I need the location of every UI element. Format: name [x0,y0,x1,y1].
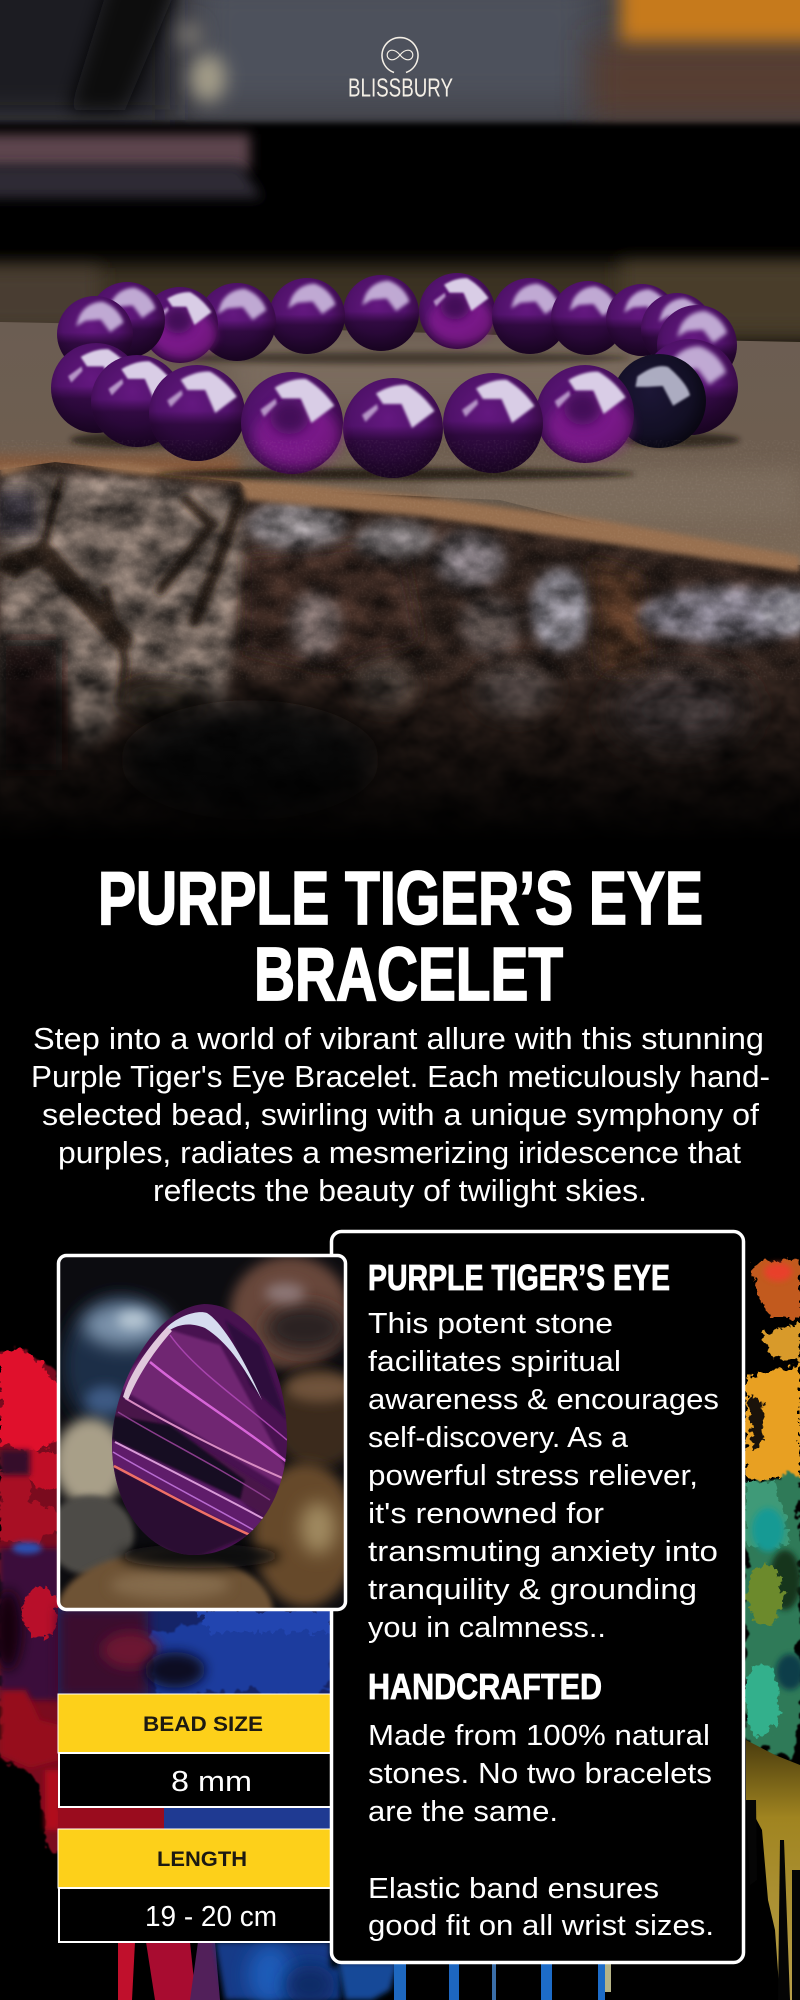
blurred photo background [60,1286,177,1432]
handcrafted description: Made from 100% natural [368,1720,710,1752]
brand name: BLISSBURY [348,72,453,102]
rock cliff face [0,462,800,818]
bead size label [58,1694,332,1753]
panel heading: handcrafted: HANDCRAFTED [368,1666,602,1707]
stone description: facilitates spiritual [368,1346,621,1378]
length label [58,1829,332,1888]
panel heading: purple tiger's eye: PURPLE TIGER’S EYE [368,1257,670,1298]
title [98,856,703,1016]
intro paragraph [31,1021,770,1208]
stone description: This potent stone [368,1308,613,1340]
blurred backdrop [0,0,800,344]
handcrafted description: stones. No two bracelets [368,1758,712,1790]
length label: LENGTH [157,1848,247,1871]
bead size label: BEAD SIZE [143,1713,263,1736]
intro paragraph: Purple Tiger's Eye Bracelet. Each meticulously hand- [31,1059,770,1094]
stone description: transmuting anxiety into [368,1536,718,1568]
hero photo: bracelet on rock [0,0,800,860]
intro paragraph: Step into a world of vibrant allure with this stunning [33,1021,764,1056]
purple stone [112,1304,287,1555]
photo border [58,1256,346,1610]
intro paragraph: purples, radiates a mesmerizing iridescence that [58,1135,741,1170]
spec table [58,1694,333,1942]
paint drips: bottom [118,1942,611,2000]
bracelet beads [51,273,738,478]
logo ring with infinity [382,38,418,72]
rock ledge edge [0,462,800,572]
photo frame [58,1254,346,1610]
title: BRACELET [254,932,563,1016]
length value: 19 - 20 cm [145,1901,277,1933]
stone description [368,1308,719,1644]
handcrafted description [368,1720,714,1942]
rock top surface [0,322,800,575]
handcrafted description: Elastic band ensures [368,1873,659,1905]
pebbles [60,1257,344,1608]
stone description: powerful stress reliever, [368,1460,698,1492]
paint splash: blue under stone photo [58,1608,332,1830]
stone description: self-discovery. As a [368,1422,628,1454]
stone description: awareness & encourages [368,1384,719,1416]
stone description: you in calmness.. [368,1612,606,1644]
stone description: tranquility & grounding [368,1574,697,1606]
info panel [332,1232,744,1962]
bracelet shadows [70,352,740,480]
paint splash: right colours [744,1260,800,2000]
stone photo [56,1254,348,1612]
handcrafted description: good fit on all wrist sizes. [368,1910,714,1942]
rock grain [0,440,800,680]
stone description: it's renowned for [368,1498,605,1530]
paint splash: left red and purple [0,1349,62,1850]
logo [348,38,453,102]
intro paragraph: reflects the beauty of twilight skies. [153,1173,647,1208]
length value [59,1888,333,1942]
intro paragraph: selected bead, swirling with a unique symphony of [42,1097,759,1132]
dark bead [612,354,706,448]
bead size value [59,1753,333,1807]
handcrafted description: are the same. [368,1796,558,1828]
bead size value: 8 mm [171,1766,252,1798]
